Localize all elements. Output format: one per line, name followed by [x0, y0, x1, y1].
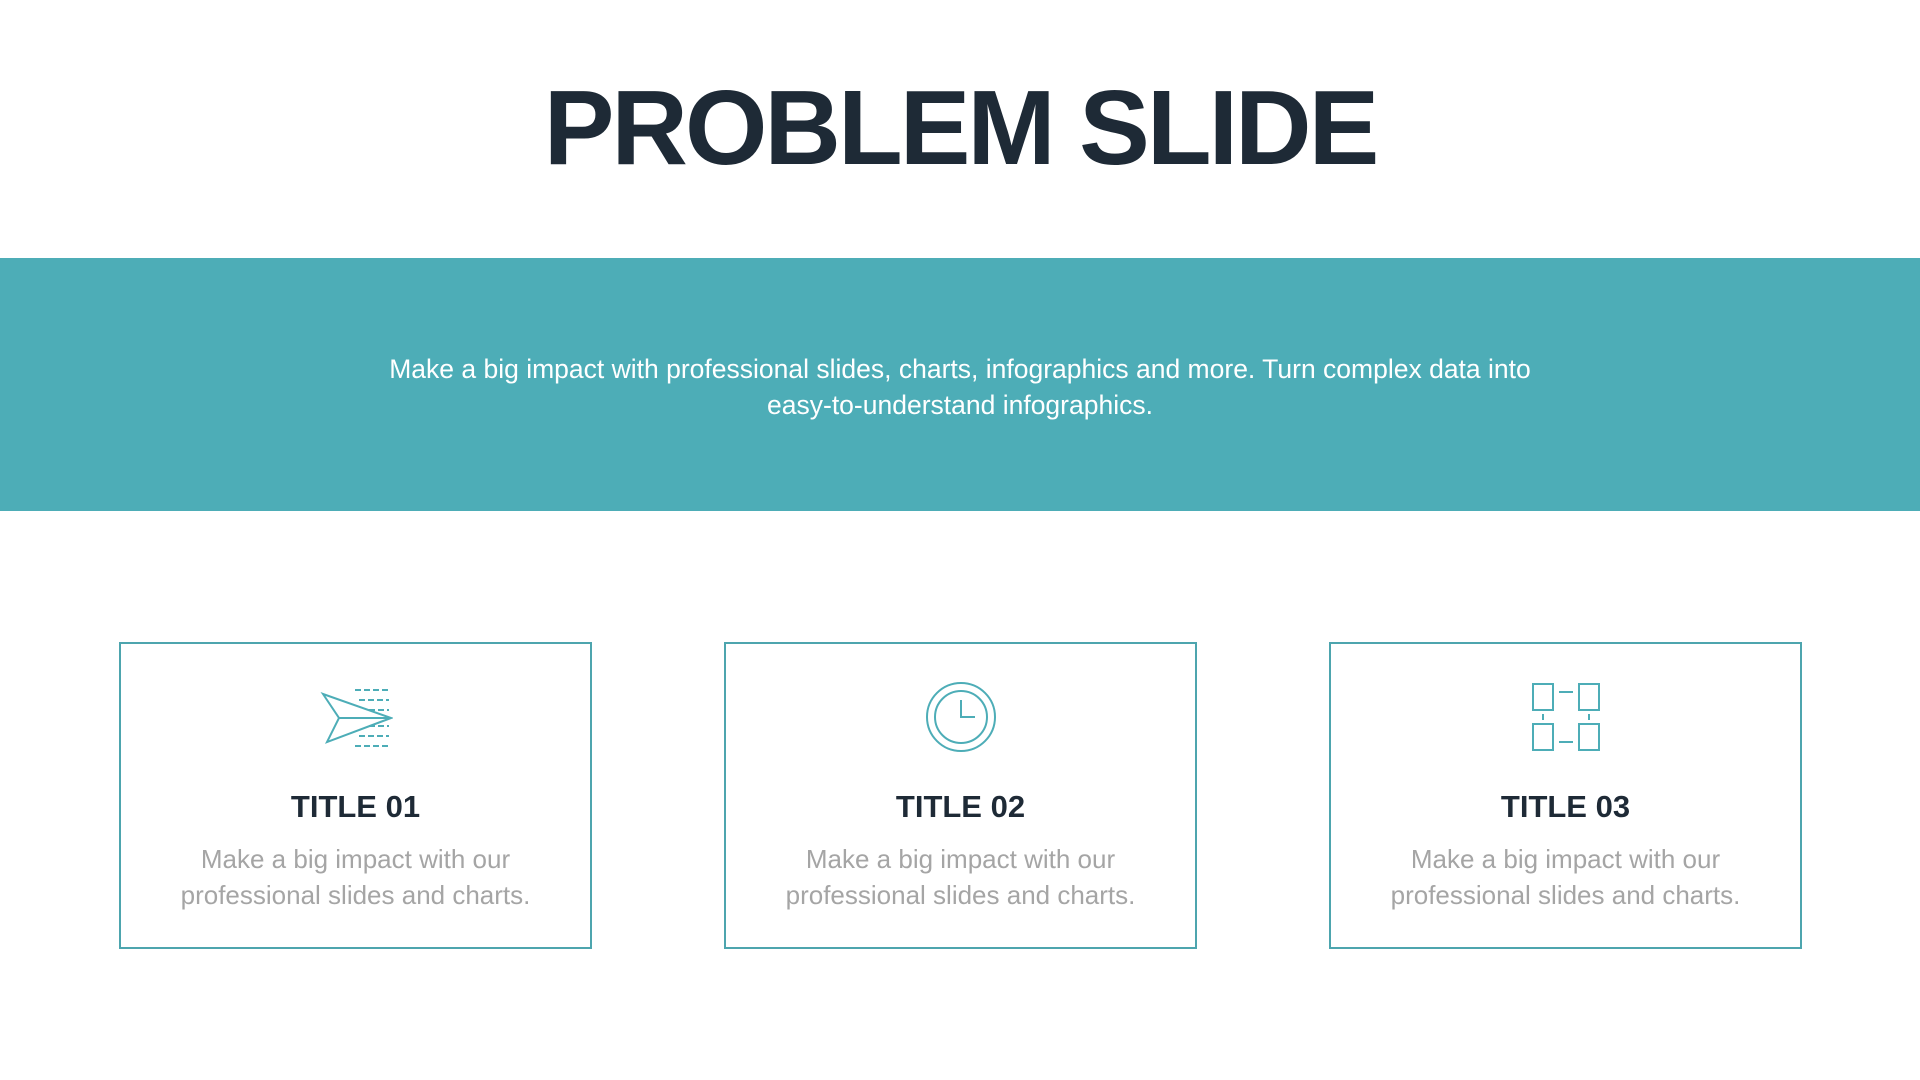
- card text: [181, 844, 530, 910]
- title: PROBLEM SLIDE: [544, 69, 1376, 187]
- card text: Make a big impact with our: [201, 844, 510, 874]
- teal banner: [0, 258, 1920, 511]
- card title: TITLE 02: [896, 789, 1025, 824]
- card text: professional slides and charts.: [1391, 880, 1740, 910]
- icon: clock: [926, 682, 996, 752]
- icon: documents cycle: [1532, 683, 1600, 751]
- banner text: Make a big impact with professional slides, charts, infographics and more. Turn complex data into: [389, 354, 1531, 384]
- banner text: [389, 354, 1531, 420]
- card text: professional slides and charts.: [786, 880, 1135, 910]
- card 1: [119, 642, 592, 949]
- banner text: easy-to-understand infographics.: [767, 390, 1153, 420]
- card text: Make a big impact with our: [1411, 844, 1720, 874]
- card text: [786, 844, 1135, 910]
- card text: professional slides and charts.: [181, 880, 530, 910]
- card text: Make a big impact with our: [806, 844, 1115, 874]
- card 2: [724, 642, 1197, 949]
- icon: paper plane: [320, 689, 393, 747]
- card text: [1391, 844, 1740, 910]
- card 3: [1329, 642, 1802, 949]
- card title: TITLE 03: [1501, 789, 1630, 824]
- card title: TITLE 01: [291, 789, 420, 824]
